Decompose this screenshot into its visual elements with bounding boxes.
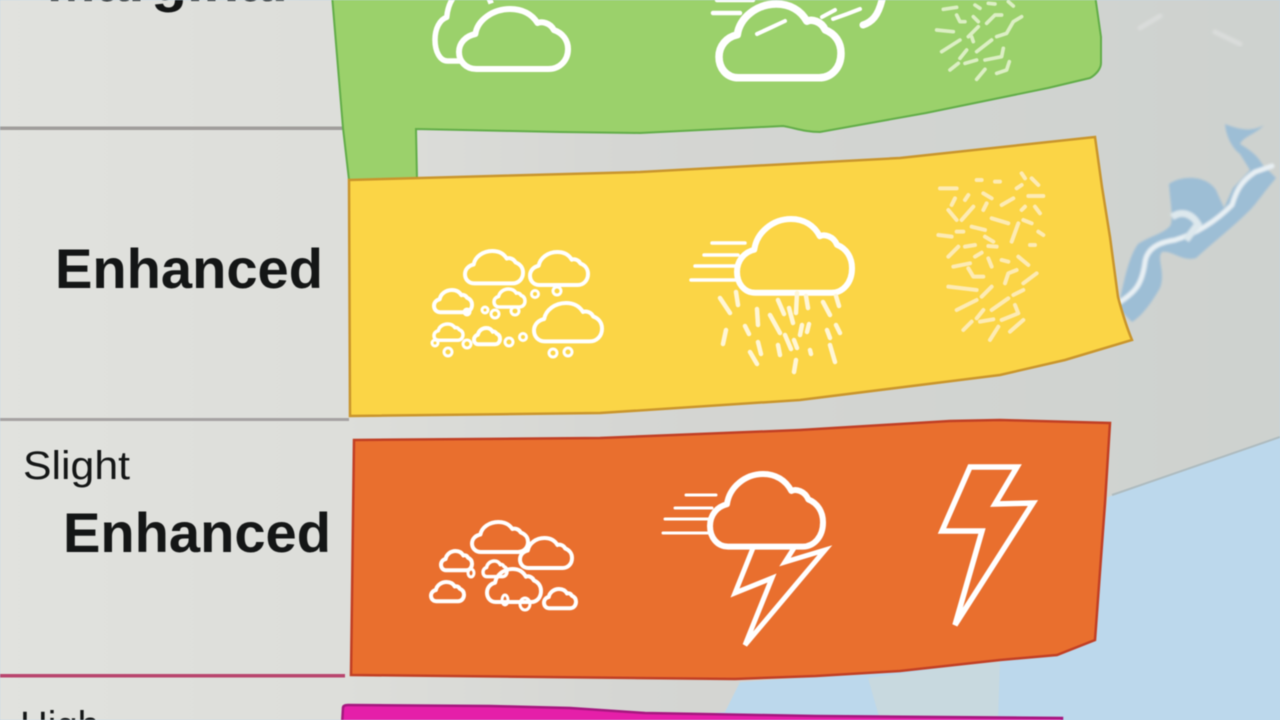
panel: marginal risk band — [332, 0, 1101, 180]
map: coastline — [1112, 437, 1280, 495]
map: pale terrain marks — [1140, 16, 1240, 44]
label: Slight: Slight — [23, 444, 130, 488]
icon: scattered streaks — [938, 173, 1043, 340]
icon: clouds — [435, 0, 568, 69]
icon: wind cloud with streaks — [713, 0, 882, 78]
label: Enhanced: Enhanced — [55, 237, 323, 300]
panel: slight-enhanced risk band — [351, 420, 1110, 679]
icon: many small clouds — [432, 251, 602, 357]
icon: wind cloud with lightning — [663, 474, 825, 645]
icon: small clouds — [431, 522, 576, 610]
icon: scattered streaks — [937, 2, 1022, 79]
divider lines — [0, 126, 349, 678]
icon: lightning bolt — [942, 467, 1033, 625]
map: southern land patch — [868, 660, 1000, 720]
panel: high risk band — [342, 705, 1062, 720]
label: Enhanced (slight tier): Enhanced — [63, 501, 331, 564]
icon: wind cloud with rain — [691, 219, 852, 372]
panel: enhanced risk band — [349, 137, 1132, 416]
map: lakes and river — [1118, 124, 1276, 322]
